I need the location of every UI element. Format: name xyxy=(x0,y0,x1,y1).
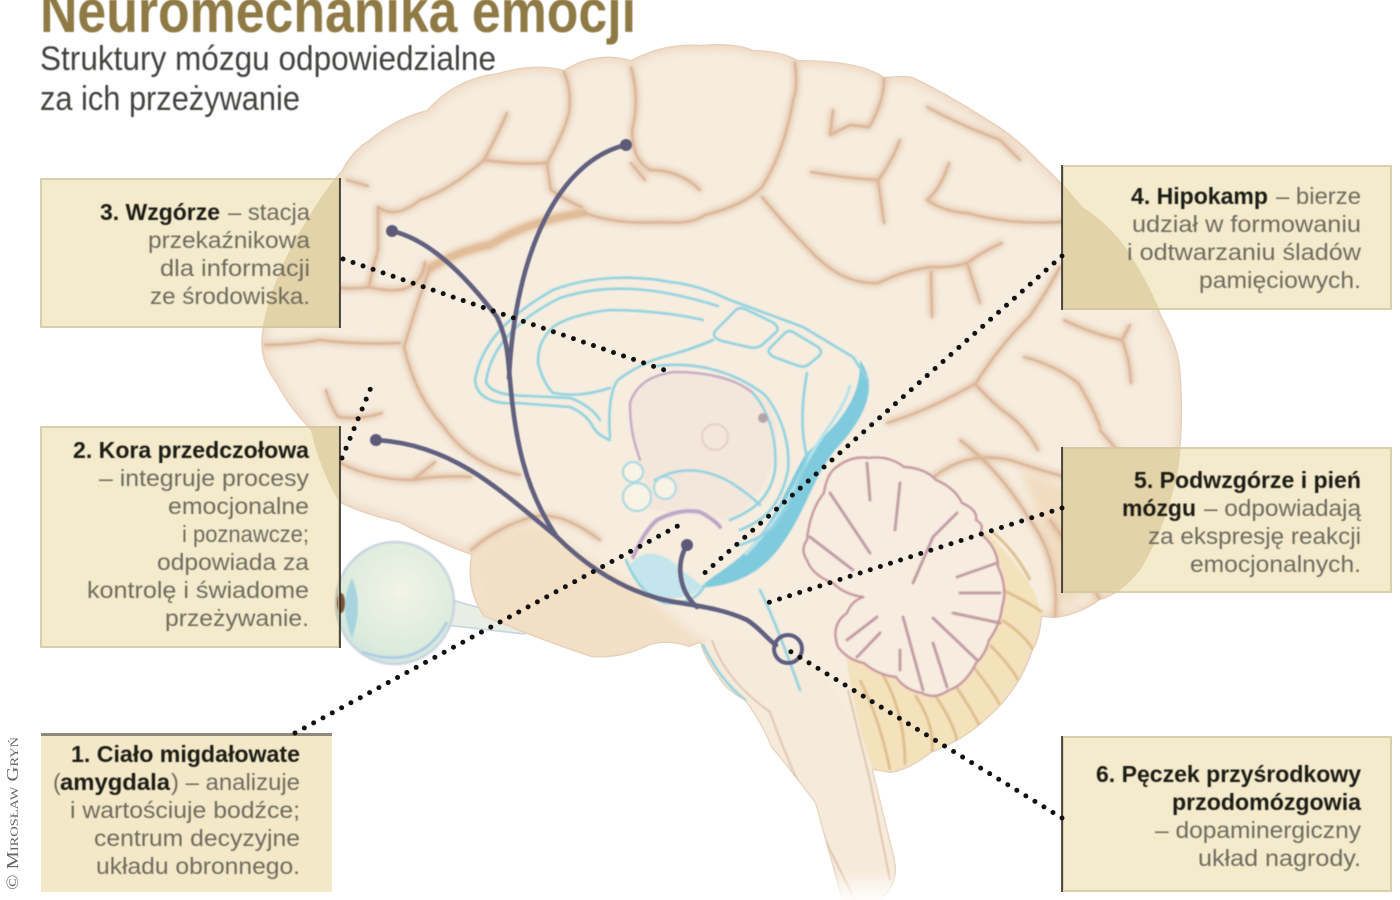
limbic system: callosum, fornix, thalamus xyxy=(475,278,869,700)
text block: 4 Hipokamp: 4. Hipokamp xyxy=(1131,183,1268,209)
occipital lobe shading xyxy=(1020,470,1090,608)
text block: 2 Kora przedczołowa: kontrolę i świadome xyxy=(87,577,309,603)
text block: 3 Wzgórze xyxy=(100,199,310,309)
icon: eyeball with optic nerve xyxy=(336,542,530,664)
text block: 5 Podwzgórze i pień mózgu: 5. Podwzgórze i pień xyxy=(1134,467,1361,493)
temporal lobe wash xyxy=(471,523,700,660)
sulci: gyri folds xyxy=(265,63,1131,618)
text block: 1 Ciało migdałowate xyxy=(53,741,300,879)
text block: 5 Podwzgórze i pień mózgu: mózgu xyxy=(1122,495,1196,521)
text block: 3 Wzgórze: ze środowiska. xyxy=(150,283,310,309)
text block: 5 Podwzgórze i pień mózgu: emocjonalnych. xyxy=(1190,551,1361,577)
dotted leader: 2 Kora przedczołowa xyxy=(342,385,372,458)
text block: 1 Ciało migdałowate: ) – analizuje xyxy=(171,769,300,795)
dotted leader: 6 Pęczek przyśrodkowy xyxy=(788,650,1062,818)
text block: 4 Hipokamp: udział w formowaniu xyxy=(1132,211,1361,237)
text block: 6 Pęczek przyśrodkowy: układ nagrody. xyxy=(1198,845,1361,871)
photo credit: © Mirosław Gryń xyxy=(3,737,22,890)
text block: 4 Hipokamp: i odtwarzaniu śladów xyxy=(1127,239,1361,265)
text block: 6 Pęczek przyśrodkowy: 6. Pęczek przyśrodkowy xyxy=(1096,761,1361,787)
illustration: sagittal section of the brain xyxy=(261,44,1182,900)
text block: 3 Wzgórze: dla informacji xyxy=(160,255,310,281)
text block: 4 Hipokamp: pamięciowych. xyxy=(1199,267,1361,293)
subtitle xyxy=(40,40,496,118)
text block: 6 Pęczek przyśrodkowy xyxy=(1096,761,1362,871)
text block: 1 Ciało migdałowate: centrum decyzyjne xyxy=(94,825,300,851)
text block: 3 Wzgórze: 3. Wzgórze xyxy=(100,199,220,225)
text block: 6 Pęczek przyśrodkowy: – dopaminergiczny xyxy=(1155,817,1362,843)
text block: 1 Ciało migdałowate: i wartościuje bodźce; xyxy=(70,797,300,823)
text block: 2 Kora przedczołowa: 2. Kora przedczołowa xyxy=(73,437,309,463)
subtitle: za ich przeżywanie xyxy=(40,80,300,118)
text block: 2 Kora przedczołowa: i poznawcze; xyxy=(182,521,309,547)
text block: 3 Wzgórze: przekaźnikowa xyxy=(148,227,310,253)
text block: 1 Ciało migdałowate: ( xyxy=(53,769,61,795)
cerebellum outer folia xyxy=(845,530,1042,773)
cerebellum arbor vitae xyxy=(804,457,1004,696)
text block: 6 Pęczek przyśrodkowy: przodomózgowia xyxy=(1172,789,1361,815)
text block: 4 Hipokamp: – bierze xyxy=(1276,183,1361,209)
text block: 3 Wzgórze: – stacja xyxy=(228,199,310,225)
dotted leader: 3 Wzgórze xyxy=(343,259,670,372)
dotted leader: 1 Ciało migdałowate xyxy=(295,522,685,733)
text block: 5 Podwzgórze i pień mózgu: za ekspresję reakcji xyxy=(1148,523,1361,549)
dotted leader: 5 Podwzgórze i pień mózgu xyxy=(767,508,1062,603)
text block: 2 Kora przedczołowa: odpowiada za xyxy=(157,549,309,575)
text block: 2 Kora przedczołowa xyxy=(73,437,310,631)
text block: 1 Ciało migdałowate: układu obronnego. xyxy=(96,853,300,879)
text block: 1 Ciało migdałowate: amygdala xyxy=(60,769,170,795)
dotted leader: 4 Hipokamp xyxy=(700,256,1062,577)
text block: 2 Kora przedczołowa: przeżywanie. xyxy=(165,605,309,631)
text block: 5 Podwzgórze i pień mózgu xyxy=(1122,467,1361,577)
panel backgrounds xyxy=(40,165,1392,892)
text block: 5 Podwzgórze i pień mózgu: – odpowiadają xyxy=(1204,495,1361,521)
subtitle: Struktury mózgu odpowiedzialne xyxy=(40,40,496,78)
text block: 2 Kora przedczołowa: – integruje procesy xyxy=(99,465,310,491)
text block: 4 Hipokamp xyxy=(1127,183,1361,293)
text block: 1 Ciało migdałowate: 1. Ciało migdałowate xyxy=(71,741,300,767)
pathway: medial forebrain bundle routes xyxy=(370,139,802,663)
brainstem xyxy=(700,640,896,900)
text block: 2 Kora przedczołowa: emocjonalne xyxy=(168,493,309,519)
